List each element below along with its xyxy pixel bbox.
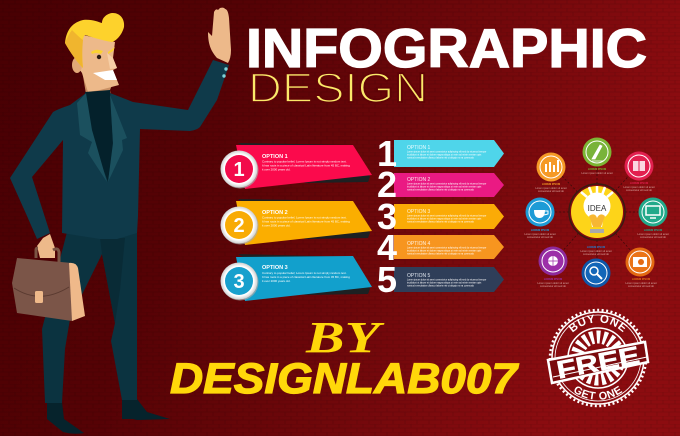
arrow 3: OPTION 3 — [407, 209, 431, 215]
arrow 3 — [377, 196, 504, 237]
hub captions: Lorem ipsum dolor sit amet — [524, 232, 556, 236]
hub captions: consectetur elit sed do — [626, 188, 653, 192]
icon: blue magnifier — [582, 258, 610, 288]
hub captions: LOREM IPSUM — [587, 245, 605, 249]
option 1 banner: Contrary to popular belief, Lorem Ipsum is not simply random text. — [262, 160, 347, 164]
arrow 5: incididunt ut labore et dolore magna aliqua ut enim ad minim veniam quis — [407, 282, 482, 284]
option 2 banner: It has roots in a piece of classical Latin literature from 45 BC, making — [262, 220, 350, 224]
hub captions: LOREM IPSUM — [588, 167, 606, 171]
arrow 5 — [377, 259, 504, 300]
panel: five numbered arrows — [377, 133, 504, 300]
option 1 banner: it over 2000 years old. — [262, 168, 291, 172]
hub captions: Lorem ipsum dolor sit amet — [537, 281, 569, 285]
stamp: buy one get one free: FREE — [554, 341, 642, 385]
arrow 5: nostrud exercitation ullamco laboris nisi ut aliquip ex ea commodo — [407, 284, 475, 288]
hub captions — [524, 167, 669, 288]
panel: three option banners — [220, 143, 372, 301]
option 2 banner: Contrary to popular belief, Lorem Ipsum is not simply random text. — [262, 216, 347, 220]
icon: cyan cup — [526, 198, 554, 226]
option 1 banner — [220, 143, 372, 189]
hub captions: LOREM IPSUM — [630, 181, 648, 185]
arrow 1: incididunt ut labore et dolore magna aliqua ut enim ad minim veniam quis — [407, 154, 482, 156]
icon: purple globe — [538, 246, 568, 276]
icon: pink book — [624, 152, 654, 180]
title — [246, 17, 647, 111]
hub captions: consectetur elit sed do — [538, 189, 565, 193]
option 3 banner: Contrary to popular belief, Lorem Ipsum is not simply random text. — [262, 271, 347, 275]
hub captions: consectetur elit sed do — [540, 284, 567, 288]
icon: orange camera — [626, 248, 654, 276]
hub captions: Lorem ipsum dolor sit amet — [535, 186, 567, 190]
illustration: businessman with briefcase — [10, 8, 231, 434]
icon: orange chart — [536, 152, 566, 182]
arrow 4: OPTION 4 — [407, 241, 431, 247]
hub captions: consectetur elit sed do — [583, 252, 610, 256]
option 2 banner — [220, 199, 372, 245]
hub captions: Lorem ipsum dolor sit amet — [637, 232, 669, 236]
arrow 4: nostrud exercitation ullamco laboris nisi ut aliquip ex ea commodo — [407, 252, 475, 256]
arrow 3: Lorem ipsum dolor sit amet consectetur adipiscing elit sed do eiusmod tempor — [407, 214, 487, 218]
stamp: buy one get one free: BUY ONE — [568, 314, 628, 332]
arrow 5: OPTION 5 — [407, 273, 431, 279]
arrow 5: 5 — [377, 259, 397, 300]
hub captions: Lorem ipsum dolor sit amet — [580, 249, 612, 253]
hub captions: Lorem ipsum dolor sit amet — [623, 185, 655, 189]
hub captions: LOREM IPSUM — [542, 182, 560, 186]
idea bulb: IDEA — [588, 204, 607, 213]
hub captions: LOREM IPSUM — [531, 228, 549, 232]
arrow 4: incididunt ut labore et dolore magna aliqua ut enim ad minim veniam quis — [407, 250, 482, 252]
title: INFOGRAPHIC — [246, 17, 647, 79]
hub captions: LOREM IPSUM — [644, 228, 662, 232]
hub captions: consectetur elit sed do — [527, 235, 554, 239]
icon: green pencil — [582, 138, 612, 166]
arrow 2: Lorem ipsum dolor sit amet consectetur adipiscing elit sed do eiusmod tempor — [407, 182, 487, 186]
title: DESIGN — [248, 64, 428, 111]
arrow 4 — [377, 227, 504, 268]
stamp: buy one get one free — [546, 308, 650, 408]
byline: BY: BY — [305, 313, 385, 362]
idea bulb — [569, 184, 625, 240]
arrow 3: 3 — [377, 196, 397, 237]
option 3 banner: OPTION 3 — [262, 265, 288, 271]
option 3 banner — [220, 254, 372, 301]
option 3 banner: it over 2000 years old. — [262, 279, 291, 283]
arrow 2: OPTION 2 — [407, 177, 431, 183]
option 3 banner: It has roots in a piece of classical Latin literature from 45 BC, making — [262, 275, 350, 279]
arrow 1: Lorem ipsum dolor sit amet consectetur adipiscing elit sed do eiusmod tempor — [407, 150, 487, 154]
option 1 banner: It has roots in a piece of classical Latin literature from 45 BC, making — [262, 164, 350, 168]
arrow 2: nostrud exercitation ullamco laboris nisi ut aliquip ex ea commodo — [407, 188, 475, 192]
hub captions: LOREM IPSUM — [632, 277, 650, 281]
hub captions: LOREM IPSUM — [544, 277, 562, 281]
arrow 4: Lorem ipsum dolor sit amet consectetur adipiscing elit sed do eiusmod tempor — [407, 246, 487, 250]
arrow 2: 2 — [377, 164, 397, 205]
option 1 banner: OPTION 1 — [262, 154, 288, 160]
hub captions: Lorem ipsum dolor sit amet — [625, 281, 657, 285]
arrow 1: nostrud exercitation ullamco laboris nisi ut aliquip ex ea commodo — [407, 156, 475, 160]
arrow 3: nostrud exercitation ullamco laboris nisi ut aliquip ex ea commodo — [407, 220, 475, 224]
option 2 banner: it over 2000 years old. — [262, 224, 291, 228]
hub captions: consectetur elit sed do — [640, 235, 667, 239]
arrow 1: OPTION 1 — [407, 145, 431, 151]
byline: DESIGNLAB007: DESIGNLAB007 — [170, 355, 519, 403]
option 2 banner: OPTION 2 — [262, 210, 288, 216]
arrow 1 — [377, 133, 504, 174]
arrow 4: 4 — [377, 227, 397, 268]
arrow 2 — [377, 164, 504, 205]
arrow 1: 1 — [377, 133, 397, 174]
arrow 3: incididunt ut labore et dolore magna aliqua ut enim ad minim veniam quis — [407, 218, 482, 220]
option 1 banner: 1 — [233, 159, 245, 181]
arrow 5: Lorem ipsum dolor sit amet consectetur adipiscing elit sed do eiusmod tempor — [407, 278, 487, 282]
panel: idea hub diagram — [524, 138, 669, 288]
option 2 banner: 2 — [233, 215, 245, 237]
option 3 banner: 3 — [233, 271, 245, 293]
icon: teal monitor — [638, 198, 668, 226]
hub captions: consectetur elit sed do — [628, 284, 655, 288]
arrow 2: incididunt ut labore et dolore magna aliqua ut enim ad minim veniam quis — [407, 186, 482, 188]
stamp: buy one get one free: GET ONE — [574, 386, 622, 400]
hub captions: Lorem ipsum dolor sit amet — [581, 171, 613, 175]
